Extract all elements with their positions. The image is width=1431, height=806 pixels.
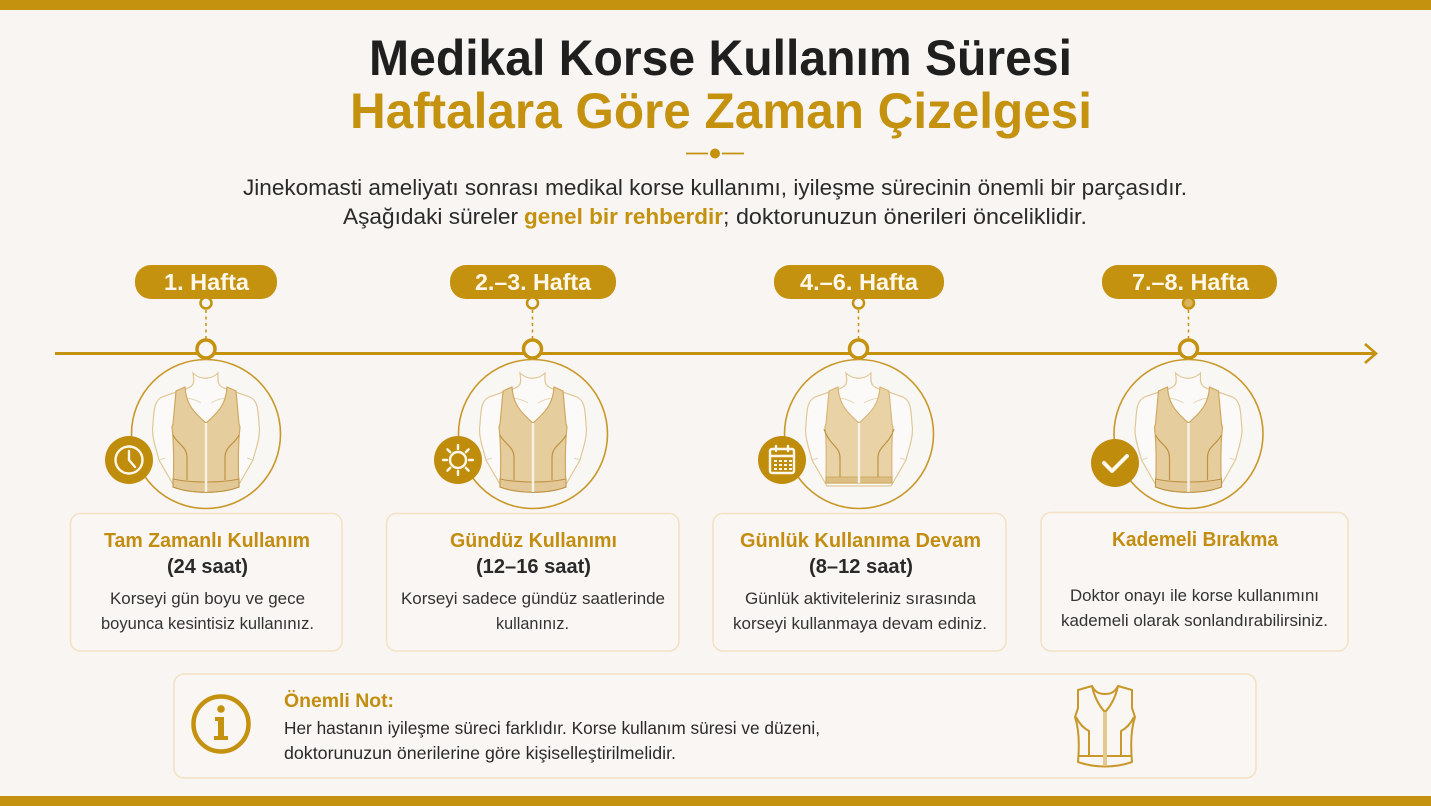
panel: daytime use: kullanınız. [496,614,569,633]
illustration: torso with vest, week 7-8 [1114,360,1263,508]
note text: doktorunuzun önerilerine göre kişiselleştirilmelidir. [284,743,676,763]
panel: daytime use: Korseyi sadece gündüz saatlerinde [401,589,665,608]
panel: important note [174,674,1256,778]
panel: full time use: (24 saat) [167,556,248,578]
panel: full time use: Korseyi gün boyu ve gece [110,589,305,608]
panel: gradual weaning: Kademeli Bırakma [1112,529,1279,551]
note text [284,691,820,763]
icon: clock [105,436,153,484]
intro text [243,175,1187,229]
step 2 pill and marker [450,265,616,358]
intro text: genel bir rehberdir [524,204,723,229]
note text: Her hastanın iyileşme süreci farklıdır. Korse kullanım süresi ve düzeni, [284,718,820,738]
icon: vest outline [1075,686,1135,766]
title: Medikal Korse Kullanım Süresi [369,30,1072,86]
panel: continued daily use: Günlük aktiviteleriniz sırasında [745,589,977,608]
panel: gradual weaning: kademeli olarak sonlandırabilirsiniz. [1061,611,1328,630]
icon: check mark [1091,439,1139,487]
step 3 pill and marker: 4.–6. Hafta [800,269,918,295]
panel: full time use [70,514,342,651]
panel: daytime use [386,514,679,651]
step 3 pill and marker [774,265,944,358]
panel: full time use: Tam Zamanlı Kullanım [104,530,310,552]
step 2 pill and marker: 2.–3. Hafta [475,269,591,295]
title: Haftalara Göre Zaman Çizelgesi [350,83,1092,139]
step 4 pill and marker [1102,265,1277,358]
panel: continued daily use: korseyi kullanmaya devam ediniz. [733,614,987,633]
title ornament [686,148,744,158]
icon: sun [434,436,482,484]
illustration: torso with vest, week 1 [132,360,280,508]
intro text: Aşağıdaki süreler [343,204,518,229]
step 1 pill and marker: 1. Hafta [164,269,249,295]
icon: calendar [758,436,806,484]
panel: gradual weaning [1041,512,1348,651]
panel: gradual weaning: Doktor onayı ile korse kullanımını [1070,586,1319,605]
icon: info [194,696,248,752]
top bar [0,0,1431,10]
panel: continued daily use: (8–12 saat) [809,556,913,578]
intro text: ; doktorunuzun önerileri önceliklidir. [723,204,1087,229]
intro text: Jinekomasti ameliyatı sonrası medikal korse kullanımı, iyileşme sürecinin önemli bir parçasıdır. [243,175,1187,200]
panel: continued daily use [713,514,1006,651]
illustration: torso with vest, week 2-3 [458,360,608,508]
timeline arrow [55,344,1376,363]
panel: full time use: boyunca kesintisiz kullanınız. [101,614,314,633]
panel: continued daily use: Günlük Kullanıma Devam [740,530,981,552]
note text: Önemli Not: [284,691,394,712]
panel: daytime use: (12–16 saat) [476,556,591,578]
bottom bar [0,796,1431,806]
illustration: torso with vest, week 4-6 [784,360,934,508]
panel: daytime use: Gündüz Kullanımı [450,530,617,552]
step 1 pill and marker [135,265,277,358]
title [350,30,1092,139]
step 4 pill and marker: 7.–8. Hafta [1132,269,1249,295]
